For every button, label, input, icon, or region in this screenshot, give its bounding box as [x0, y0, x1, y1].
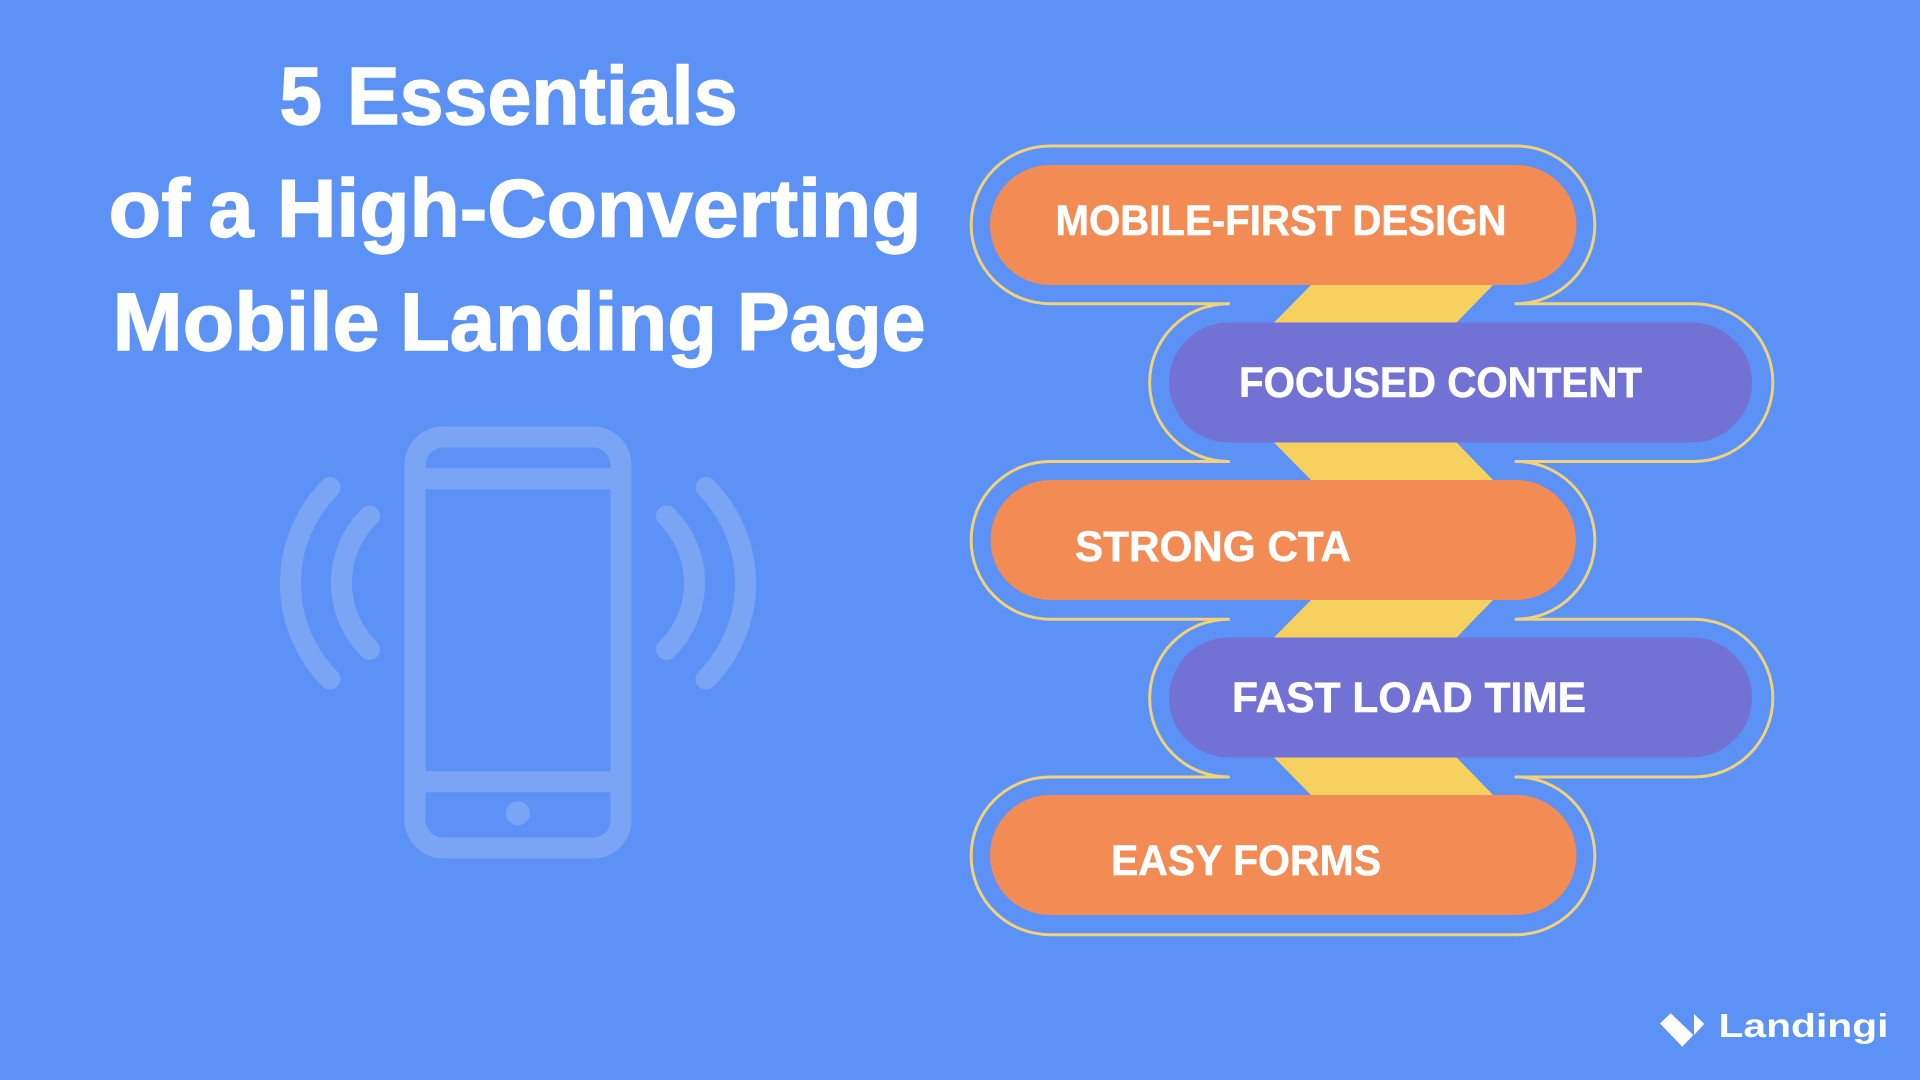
phone top bar: [415, 468, 621, 489]
right vibration waves: [666, 488, 746, 679]
phone bottom bar: [415, 771, 621, 792]
title: of: [108, 164, 191, 254]
title: [108, 51, 926, 368]
title: Landing: [400, 277, 717, 368]
phone home button: [506, 801, 530, 825]
step 1: mobile-first design: MOBILE-FIRST DESIGN: [1056, 197, 1506, 245]
title: High-Converting: [277, 164, 922, 254]
winding yellow outline: [971, 146, 1773, 935]
step 1: mobile-first design: [990, 165, 1576, 285]
step 4: fast load time: [1169, 638, 1752, 758]
title: Essentials: [347, 51, 738, 142]
yellow connectors between steps: [1274, 285, 1493, 795]
logo mark: [1660, 1013, 1704, 1047]
left vibration waves: [290, 488, 370, 679]
step 3: strong cta: STRONG CTA: [1075, 523, 1351, 571]
logo: Landingi: [1660, 1007, 1888, 1047]
step 4: fast load time: FAST LOAD TIME: [1232, 674, 1586, 722]
title: Mobile: [112, 277, 380, 368]
icon: vibrating phone: [290, 437, 746, 848]
phone body: [415, 437, 621, 848]
title: a: [208, 164, 255, 254]
step 2: focused content: [1169, 322, 1752, 442]
step 5: easy forms: [990, 795, 1576, 915]
step 2: focused content: FOCUSED CONTENT: [1239, 359, 1642, 407]
logo wordmark: Landingi: [1718, 1007, 1888, 1044]
step 5: easy forms: EASY FORMS: [1111, 837, 1381, 885]
title: 5: [280, 51, 322, 142]
step 3: strong cta: [990, 480, 1576, 600]
title: Page: [737, 277, 926, 368]
